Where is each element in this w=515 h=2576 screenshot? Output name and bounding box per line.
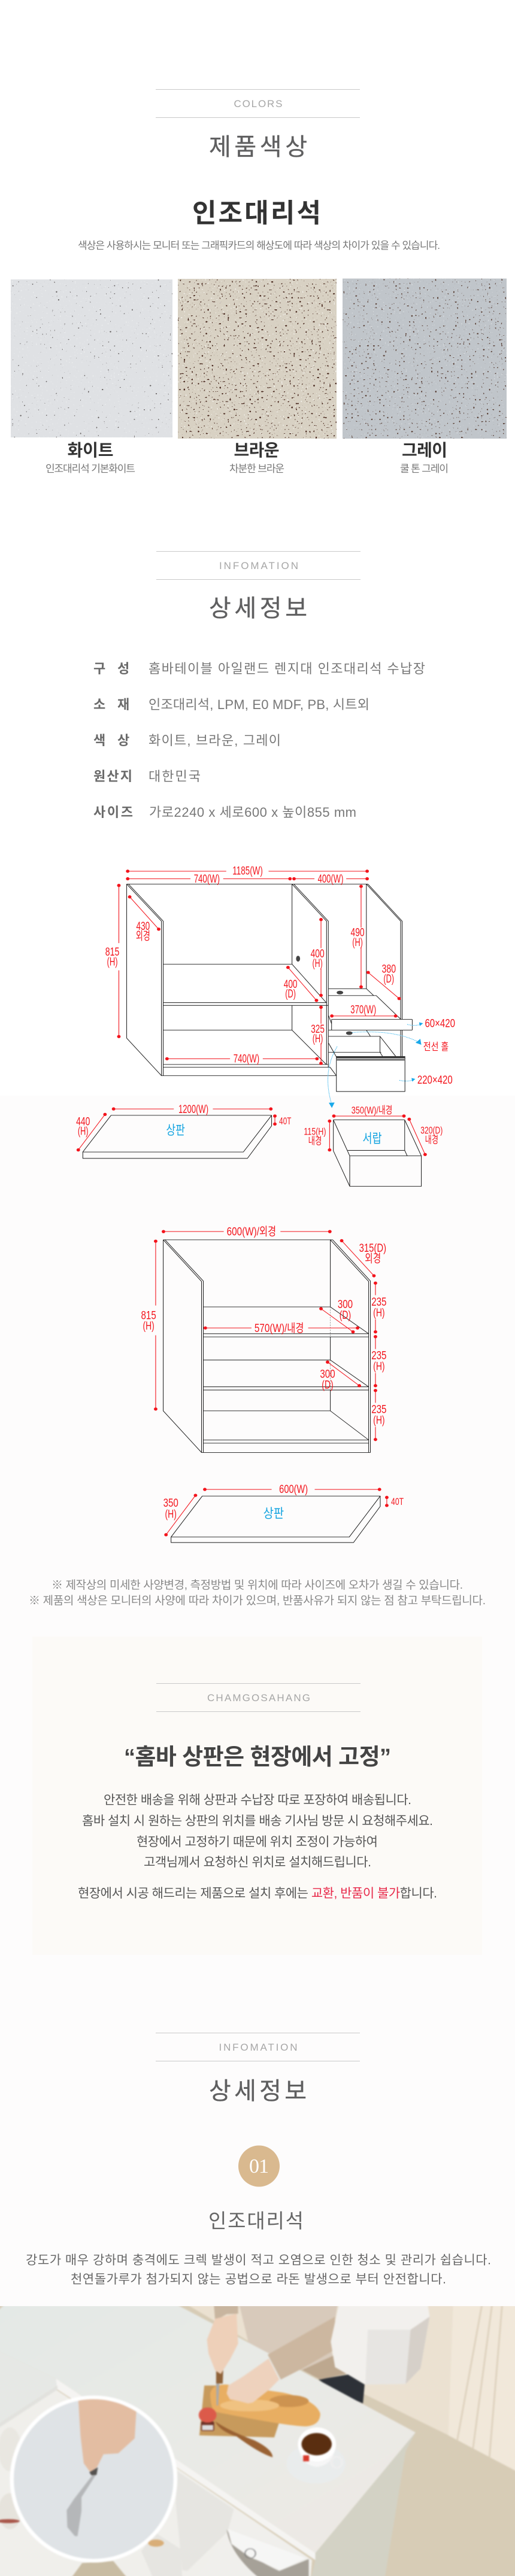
dim: 815(H) <box>105 884 120 1038</box>
swatch: white <box>11 279 172 437</box>
dim: 300(D) lower: 300 <box>320 1368 335 1380</box>
dim: 430 외경 <box>128 895 160 942</box>
dim: 235(H) top <box>371 1282 386 1333</box>
dim: 740(W) top: 740(W) <box>194 873 220 886</box>
dim: 400(D) <box>284 966 318 1002</box>
dim: 235(H) bottom: 235 <box>371 1403 386 1416</box>
cutting board <box>199 2386 279 2437</box>
dim: 400(W) <box>292 873 369 886</box>
dim: 400(W): 400(W) <box>318 873 344 886</box>
dim: 400(H): 400 <box>311 948 325 960</box>
label: 상판: 상판 <box>263 1507 284 1520</box>
row: 원산지 <box>93 769 201 784</box>
spec table <box>93 661 425 820</box>
swatch label: white <box>46 441 135 475</box>
badge: 01 <box>238 2146 280 2186</box>
drawer box: 내경 <box>425 1134 438 1145</box>
row: 색상: 화이트, 브라운, 그레이 <box>149 733 281 748</box>
photo: kitchen island with countertop <box>0 2300 515 2576</box>
dim: 490(H): (H) <box>352 936 363 949</box>
swatch label: white: 화이트 <box>67 441 114 460</box>
panel: 참고사항 <box>32 1637 482 1955</box>
bread <box>210 2385 320 2426</box>
jam jar <box>199 2407 216 2431</box>
dim: 380(D): (D) <box>383 973 394 986</box>
dim: 300(D) upper <box>319 1298 355 1333</box>
dim: 490(H) <box>351 885 365 989</box>
heading: 인조대리석 feature: 인조대리석 <box>208 2210 304 2232</box>
dim: 380(D): 380 <box>381 963 396 975</box>
badge: 01: 01 <box>249 2155 269 2177</box>
label: COLORS: COLORS <box>234 98 283 110</box>
drawer box: 320(D) <box>420 1124 443 1136</box>
row: 사이즈: 가로2240 x 세로600 x 높이855 mm <box>149 805 356 820</box>
dim: 430 외경: 430 <box>137 920 150 933</box>
label: 상판: 상판 <box>166 1123 185 1138</box>
dim: 370(W) <box>330 1003 398 1018</box>
note text <box>29 1579 486 1607</box>
dim: 400(H): (H) <box>313 957 323 970</box>
swatch label: brown <box>229 441 284 475</box>
cabinet outline <box>163 1240 371 1452</box>
dim: 400(H) <box>311 918 325 997</box>
dim: 235(H) top: (H) <box>373 1307 385 1319</box>
panel title: “홈바 상판은 현장에서 고정” <box>124 1745 391 1770</box>
dim: 430 외경: 외경 <box>136 929 150 942</box>
top board 600: 600(W) <box>279 1483 308 1496</box>
label: 전선 홀: 전선 홀 <box>423 1041 449 1053</box>
drawer box: 350(W)/내경 <box>352 1105 392 1116</box>
dim: 815(H) <box>141 1240 157 1410</box>
label: 220x420: 220×420 <box>417 1074 453 1087</box>
page tint background <box>0 1096 515 2306</box>
cabinet side face <box>310 2432 416 2576</box>
cabinet interior <box>0 2389 312 2576</box>
dim: 370(W): 370(W) <box>350 1003 376 1016</box>
top board 600: 350 <box>163 1497 178 1510</box>
dim: 235(H) bottom <box>371 1389 386 1441</box>
hands <box>207 2314 335 2405</box>
panel body text: 현장에서 시공 해드리는 제품으로 설치 후에는 교환, 반품이 불가합니다. <box>78 1887 437 1900</box>
heading: 상세정보: 상세정보 <box>209 595 307 622</box>
row: 구성: 홈바테이블 아일랜드 렌지대 인조대리석 수납장 <box>149 661 425 676</box>
drawer box: 115(H) <box>304 1126 326 1137</box>
dim: 325(H): (H) <box>313 1033 323 1045</box>
top board 1200 <box>76 1103 292 1158</box>
swatch label: gray: 쿨 톤 그레이 <box>400 463 449 475</box>
top board 1200: (H) <box>78 1125 89 1138</box>
dim: 400(D): (D) <box>285 988 296 1000</box>
heading: 제품색상: 제품색상 <box>209 134 307 160</box>
dim: 815(H): (H) <box>143 1320 154 1333</box>
dim: 740(W) bottom <box>165 1053 319 1065</box>
dim: 300(D) lower: (D) <box>322 1379 334 1391</box>
swatch: brown <box>178 279 337 439</box>
feature description: 천연돌가루가 첨가되지 않는 공법으로 라돈 발생으로 부터 안전합니다. <box>71 2273 446 2286</box>
panel header: CHAMGOSAHANG <box>207 1692 310 1704</box>
callout arrows <box>328 1023 423 1108</box>
feature description <box>26 2253 491 2286</box>
floor <box>0 2302 515 2576</box>
heading: 인조대리석: 인조대리석 <box>192 199 321 228</box>
dim: 235(H) bottom: (H) <box>373 1414 385 1427</box>
swatch label: white: 인조대리석 기본화이트 <box>46 463 135 475</box>
swatch label: brown: 브라운 <box>234 441 279 460</box>
drawer box <box>304 1105 443 1187</box>
person <box>214 2300 365 2404</box>
dim: 380(D) <box>366 963 401 1000</box>
dim: 1185(W): 1185(W) <box>232 865 263 877</box>
dim: 300(D) upper: 300 <box>338 1298 353 1311</box>
dim: 570(W) 내경: 570(W)/내경 <box>255 1322 304 1335</box>
dim: 490(H): 490 <box>351 926 365 939</box>
top board 1200: 1200(W) <box>178 1103 208 1116</box>
top board 1200: 40T <box>279 1115 292 1127</box>
dim: 815(H): 815 <box>141 1309 156 1322</box>
label: 60x420: 60×420 <box>425 1017 455 1030</box>
top board 600: 40T <box>391 1496 404 1507</box>
label: 서랍: 서랍 <box>363 1132 381 1146</box>
text: colour notice: 색상은 사용하시는 모니터 또는 그래픽카드의 해상도에 따라 색상의 차이가 있을 수 있습니다. <box>78 240 440 251</box>
pendant lamp <box>331 2300 429 2385</box>
dim: 740(W) bottom: 740(W) <box>234 1053 259 1065</box>
dim: 315(D) 외경: 외경 <box>365 1252 381 1265</box>
panel body text: 현장에서 고정하기 때문에 위치 조정이 가능하여 <box>137 1835 378 1849</box>
dim: 325(H): 325 <box>311 1023 325 1036</box>
swatch label: brown: 차분한 브라운 <box>229 463 284 475</box>
dim: 235(H) middle <box>371 1335 386 1387</box>
top board 600: (H) <box>165 1508 177 1520</box>
row: 사이즈: 사이즈 <box>93 805 133 820</box>
dim: 315(D) 외경: 315(D) <box>359 1242 386 1255</box>
dim: 235(H) top: 235 <box>371 1296 386 1309</box>
dim: 1185(W) <box>126 865 369 877</box>
dim: 815(H): 815 <box>105 946 119 959</box>
row: 원산지: 원산지 <box>93 769 132 784</box>
note text: ※ 제작상의 미세한 사양변경, 측정방법 및 위치에 따라 사이즈에 오차가 생길 수 있습니다. <box>51 1579 463 1592</box>
top board 1200: 440 <box>76 1115 90 1128</box>
dim: 300(D) upper: (D) <box>340 1309 351 1322</box>
dim: 325(H) <box>311 1006 325 1065</box>
panel body text <box>78 1793 437 1900</box>
note text: ※ 제품의 색상은 모니터의 사양에 따라 차이가 있으며, 반품사유가 되지 않는 점 참고 부탁드립니다. <box>29 1594 486 1607</box>
row: 소재: 소재 <box>93 697 129 712</box>
panel body text: 고객님께서 요청하신 위치로 설치해드립니다. <box>144 1856 371 1869</box>
diagram: side cabinet with dimensions <box>141 1225 404 1543</box>
spreader knife <box>215 2422 272 2458</box>
dim: 600(W) 외경 <box>162 1225 332 1238</box>
swatch label: gray: 그레이 <box>402 441 447 460</box>
dim: 235(H) middle: (H) <box>373 1361 385 1373</box>
wall and curtain <box>179 2300 515 2474</box>
dim: 740(W) top <box>126 873 292 886</box>
heading: 상세정보: 상세정보 <box>209 2078 307 2104</box>
label: INFOMATION: INFOMATION <box>219 560 298 571</box>
label: INFOMATION: INFOMATION <box>219 2042 297 2053</box>
feature description: 강도가 매우 강하며 충격에도 크렉 발생이 적고 오염으로 인한 청소 및 관리가 쉽습니다. <box>26 2253 491 2267</box>
swatch: gray <box>343 279 507 439</box>
top board 600 <box>163 1483 404 1543</box>
swatch label: gray <box>400 441 449 475</box>
row: 소재: 인조대리석, LPM, E0 MDF, PB, 시트외 <box>149 697 369 712</box>
row: 원산지: 대한민국 <box>149 769 201 784</box>
drawer box: 내경 <box>308 1135 322 1146</box>
dim: 815(H): (H) <box>107 956 118 968</box>
inset circle: fork test on surface <box>10 2395 177 2563</box>
dim: 570(W) 내경 <box>204 1322 359 1335</box>
row: 구성: 구성 <box>93 661 129 676</box>
diagram: range cabinet with dimensions <box>76 865 455 1187</box>
panel body text: 홈바 설치 시 원하는 상판의 위치를 배송 기사님 방문 시 요청해주세요. <box>82 1814 433 1828</box>
dim: 600(W) 외경: 600(W)/외경 <box>227 1225 276 1238</box>
dim: 315(D) 외경 <box>340 1239 386 1278</box>
countertop <box>0 2300 416 2560</box>
dim: 235(H) middle: 235 <box>371 1350 386 1362</box>
row: 색상: 색상 <box>93 733 129 748</box>
dim: 300(D) lower <box>320 1361 361 1391</box>
cabinet outline <box>127 884 412 1091</box>
coffee cup and saucer <box>298 2427 343 2468</box>
panel body text: 안전한 배송을 위해 상판과 수납장 따로 포장하여 배송됩니다. <box>104 1793 411 1807</box>
dim: 400(D): 400 <box>284 978 297 991</box>
